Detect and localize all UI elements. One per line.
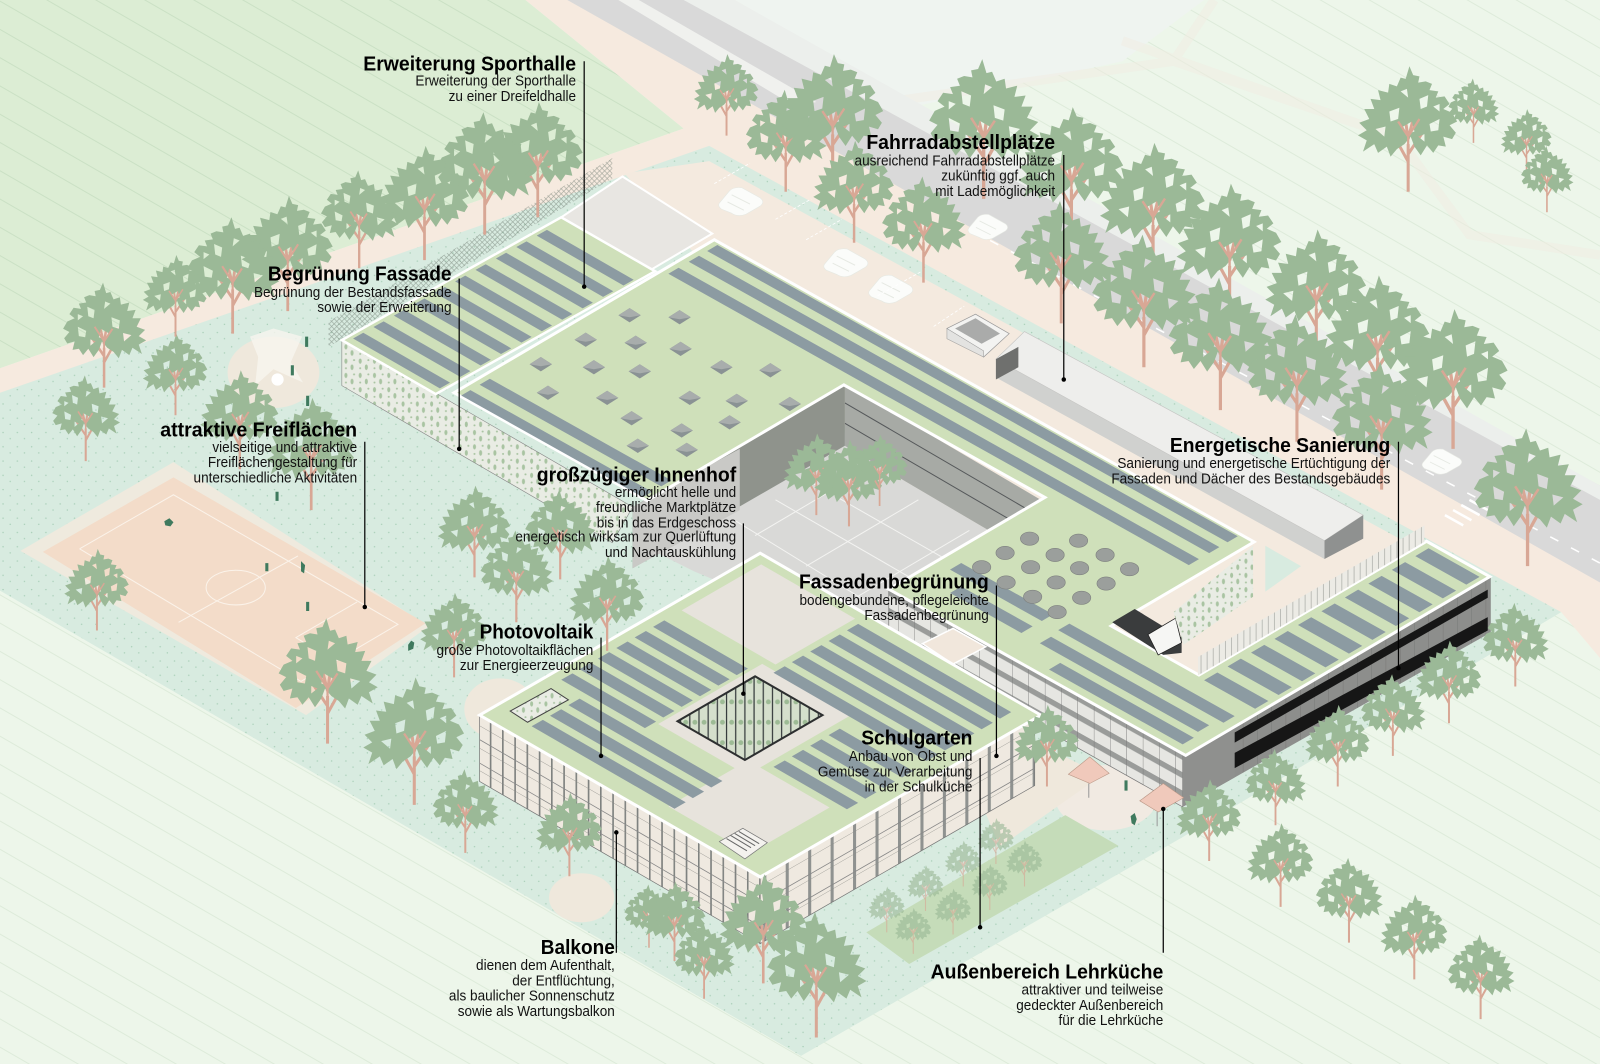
callout: großzügiger Innenhof: freundliche Marktplätze	[596, 499, 736, 515]
roof terraces	[505, 564, 1006, 853]
callout: Außenbereich Lehrküche: gedeckter Außenbereich	[1016, 997, 1163, 1013]
callout: Erweiterung Sporthalle	[363, 53, 586, 289]
callout: Balkone	[449, 830, 619, 1019]
callout: Balkone: der Entflüchtung,	[512, 972, 615, 989]
callout: großzügiger Innenhof: großzügiger Innenhof	[537, 465, 736, 487]
photovoltaic strips south roof	[506, 566, 1013, 859]
parking cars	[714, 163, 1462, 474]
skylights	[530, 308, 801, 457]
callout: Außenbereich Lehrküche	[931, 807, 1166, 1028]
trees: north-west row	[63, 102, 583, 415]
connecting block	[922, 628, 986, 694]
school garden plot	[866, 815, 1118, 964]
long photovoltaic strips	[461, 245, 1393, 774]
trees: west open space	[52, 370, 644, 853]
callout: Begrünung Fassade: sowie der Erweiterung	[317, 299, 452, 315]
callout: Schulgarten: Anbau von Obst und	[849, 748, 972, 764]
east wing photovoltaic panels	[1204, 548, 1480, 709]
callout: Außenbereich Lehrküche: für die Lehrküche	[1058, 1012, 1164, 1028]
callout: Energetische Sanierung: Fassaden und Dächer des Bestandsgebäudes	[1111, 470, 1390, 487]
callout: Photovoltaik: zur Energieerzeugung	[460, 657, 593, 673]
callout: Fassadenbegrünung	[799, 572, 999, 758]
trees: around south building	[536, 705, 1079, 1037]
callout: großzügiger Innenhof	[515, 465, 746, 696]
callout: Photovoltaik	[437, 622, 603, 758]
callout: Fahrradabstellplätze	[855, 132, 1066, 382]
callout: Begrünung Fassade	[254, 264, 461, 451]
teaching kitchen terrace parasols	[1068, 757, 1184, 826]
round skylights	[972, 532, 1139, 619]
callout: Begrünung Fassade: Begrünung Fassade	[268, 264, 452, 286]
callout: attraktive Freiflächen	[160, 420, 367, 609]
callout: Fassadenbegrünung: Fassadenbegrünung	[864, 607, 989, 623]
panel: west facade with vines	[342, 339, 633, 543]
callout: Fassadenbegrünung: Fassadenbegrünung	[799, 572, 989, 594]
callout: Fahrradabstellplätze: mit Lademöglichkeit	[935, 183, 1055, 199]
trees: east lawn	[1177, 603, 1549, 1019]
callout: Balkone: als baulicher Sonnenschutz	[449, 987, 615, 1004]
roof opening with vines	[510, 689, 568, 722]
road and verge	[0, 0, 1600, 658]
panel: sports hall extension roof	[561, 176, 712, 270]
callout: Erweiterung Sporthalle: zu einer Dreifeldhalle	[449, 88, 576, 104]
central atrium	[678, 676, 822, 760]
panel: sports hall green roof	[342, 217, 655, 394]
callout: Außenbereich Lehrküche: Außenbereich Lehrküche	[931, 961, 1163, 983]
callout: großzügiger Innenhof: energetisch wirksam zur Querlüftung	[515, 528, 736, 545]
utility box	[947, 314, 1009, 357]
trees: road alley	[694, 54, 1583, 566]
callout: Balkone: dienen dem Aufenthalt,	[476, 957, 615, 973]
callout: Balkone: sowie als Wartungsbalkon	[458, 1003, 615, 1019]
callout: Fassadenbegrünung: bodengebundene, pflegeleichte	[799, 592, 989, 608]
callout: attraktive Freiflächen: Freiflächengestaltung für	[208, 454, 357, 470]
callout: attraktive Freiflächen: attraktive Freiflächen	[160, 420, 357, 442]
callout: Fahrradabstellplätze: ausreichend Fahrradabstellplätze	[855, 152, 1055, 168]
callout: Schulgarten: in der Schulküche	[865, 778, 973, 795]
fence along sports hall	[329, 158, 612, 347]
callout: Fahrradabstellplätze: zukünftig ggf. auch	[941, 167, 1055, 184]
small courtyard	[1112, 525, 1424, 675]
callout: Erweiterung Sporthalle: Erweiterung Sporthalle	[363, 53, 576, 75]
panel: main building green roof	[454, 190, 1490, 779]
callout: Photovoltaik: Photovoltaik	[480, 622, 594, 644]
tent and seating	[250, 328, 309, 501]
callout: großzügiger Innenhof: und Nachtauskühlung	[605, 544, 736, 560]
panel: east wing facade	[1183, 577, 1491, 807]
bike shelter	[996, 332, 1363, 559]
stair on terrace	[719, 828, 767, 859]
trees: north-east meadow	[1358, 66, 1573, 212]
callout: Energetische Sanierung	[1111, 435, 1401, 670]
callout: attraktive Freiflächen: vielseitige und attraktive	[212, 439, 357, 455]
callout: Energetische Sanierung: Sanierung und energetische Ertüchtigung der	[1117, 455, 1391, 471]
callout: Schulgarten: Schulgarten	[861, 728, 972, 750]
trees: school garden	[868, 818, 1042, 954]
panel: south building green roof	[480, 553, 1041, 877]
callout: Photovoltaik: große Photovoltaikflächen	[437, 642, 593, 658]
callout: attraktive Freiflächen: unterschiedliche Aktivitäten	[194, 469, 357, 486]
panel: main south facade	[889, 589, 1183, 807]
callout: Fahrradabstellplätze: Fahrradabstellplätze	[866, 132, 1055, 154]
panel: south building facades	[480, 715, 1035, 944]
callout: Außenbereich Lehrküche: attraktiver und teilweise	[1022, 981, 1164, 998]
callout: Balkone: Balkone	[541, 937, 615, 959]
callout: großzügiger Innenhof: ermöglicht helle und	[615, 483, 736, 500]
callout: Schulgarten: Gemüse zur Verarbeitung	[818, 763, 972, 779]
callout: Erweiterung Sporthalle: Erweiterung der Sporthalle	[415, 72, 576, 89]
callout: großzügiger Innenhof: bis in das Erdgeschoss	[597, 514, 736, 530]
main courtyard	[633, 385, 1041, 653]
callout: Energetische Sanierung: Energetische Sanierung	[1170, 435, 1390, 457]
sports field	[20, 462, 429, 715]
callout: Schulgarten	[818, 728, 982, 930]
callout: Begrünung Fassade: Begrünung der Bestandsfassade	[254, 284, 452, 300]
